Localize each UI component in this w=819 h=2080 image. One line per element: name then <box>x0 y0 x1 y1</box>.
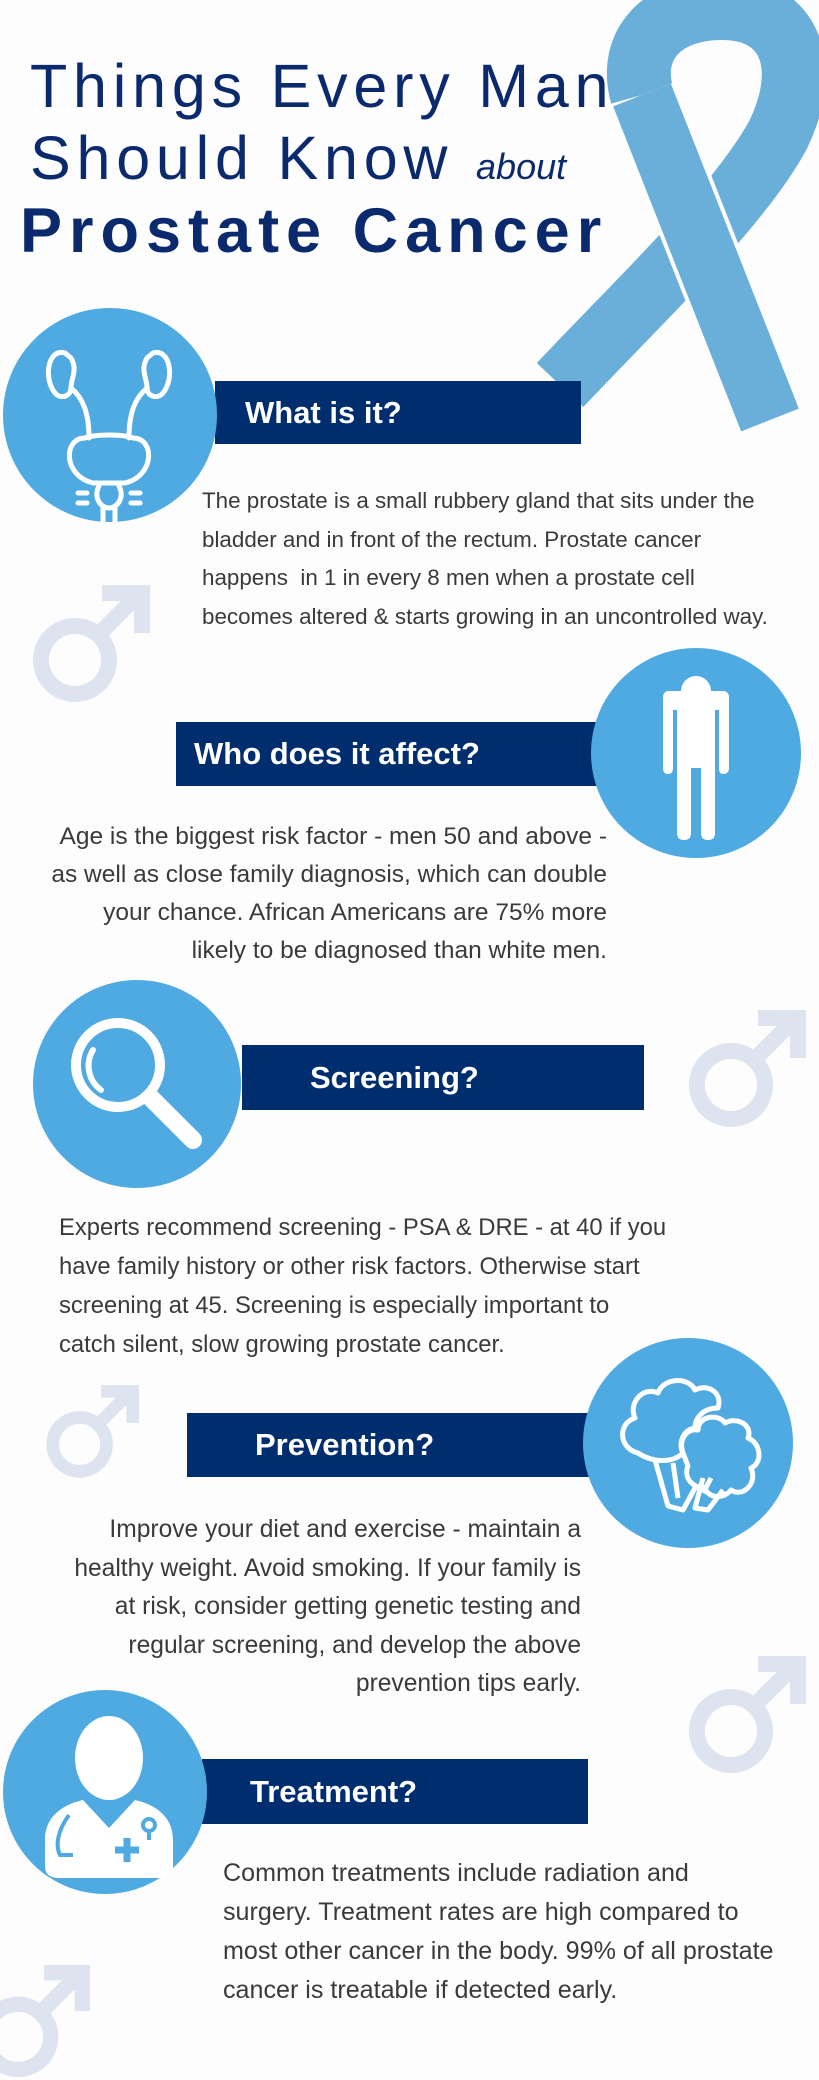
paragraph: bladder and in front of the rectum. Prostate cancer <box>202 526 701 552</box>
icon: magnifier <box>33 980 241 1188</box>
paragraph: your chance. African Americans are 75% more <box>103 899 607 926</box>
heading bar <box>176 722 616 786</box>
icon: male sign 5 <box>0 1965 90 2077</box>
paragraph: as well as close family diagnosis, which can double <box>51 861 607 888</box>
icon: doctor <box>3 1690 207 1894</box>
icon: male sign 3 <box>46 1385 139 1478</box>
paragraph: regular screening, and develop the above <box>128 1632 581 1658</box>
icon: urinary system <box>3 308 217 522</box>
heading bar: Who does it affect? <box>194 736 480 771</box>
section: prevention <box>74 1338 793 1697</box>
heading bar <box>187 1413 589 1477</box>
paragraph: prevention tips early. <box>356 1670 581 1697</box>
paragraph <box>202 488 768 628</box>
paragraph: The prostate is a small rubbery gland that sits under the <box>202 488 755 513</box>
title: Things Every Man <box>30 52 614 120</box>
icon: broccoli <box>583 1338 793 1548</box>
heading bar <box>242 1045 644 1110</box>
title: Prostate Cancer <box>20 196 608 266</box>
paragraph: most other cancer in the body. 99% of all prostate <box>223 1937 774 1965</box>
heading bar: What is it? <box>245 394 402 430</box>
icon: male sign 1 <box>33 585 150 702</box>
heading bar: Prevention? <box>255 1427 434 1462</box>
heading bar: Screening? <box>310 1060 479 1094</box>
paragraph: likely to be diagnosed than white men. <box>192 937 607 964</box>
paragraph <box>223 1859 774 2004</box>
icon: male sign 4 <box>689 1656 806 1773</box>
paragraph: screening at 45. Screening is especially important to <box>59 1292 609 1319</box>
section: treatment <box>3 1690 774 2004</box>
paragraph <box>59 1214 666 1358</box>
paragraph <box>74 1516 582 1697</box>
section: what is it <box>3 308 768 628</box>
heading bar <box>202 1759 588 1824</box>
paragraph: happens in 1 in every 8 men when a prostate cell <box>202 565 695 590</box>
title: Should Know about <box>30 124 566 192</box>
icon: person <box>591 648 801 858</box>
title <box>20 52 614 266</box>
paragraph: Common treatments include radiation and <box>223 1859 689 1887</box>
section: screening <box>33 980 666 1358</box>
icon: male sign 2 <box>689 1010 806 1127</box>
paragraph: becomes altered & starts growing in an uncontrolled way. <box>202 604 768 628</box>
paragraph: have family history or other risk factors. Otherwise start <box>59 1253 640 1280</box>
heading bar: Treatment? <box>250 1774 417 1808</box>
paragraph: Experts recommend screening - PSA & DRE - at 40 if you <box>59 1214 666 1241</box>
paragraph: Improve your diet and exercise - maintain a <box>109 1516 581 1543</box>
paragraph <box>51 823 607 964</box>
paragraph: at risk, consider getting genetic testing and <box>115 1593 581 1620</box>
heading bar <box>215 381 581 444</box>
ribbon <box>536 0 819 432</box>
paragraph: healthy weight. Avoid smoking. If your family is <box>74 1554 581 1582</box>
paragraph: Age is the biggest risk factor - men 50 and above - <box>60 823 607 850</box>
paragraph: catch silent, slow growing prostate cancer. <box>59 1331 505 1358</box>
paragraph: surgery. Treatment rates are high compared to <box>223 1898 739 1926</box>
paragraph: cancer is treatable if detected early. <box>223 1976 617 2004</box>
section: who does it affect <box>51 648 801 964</box>
